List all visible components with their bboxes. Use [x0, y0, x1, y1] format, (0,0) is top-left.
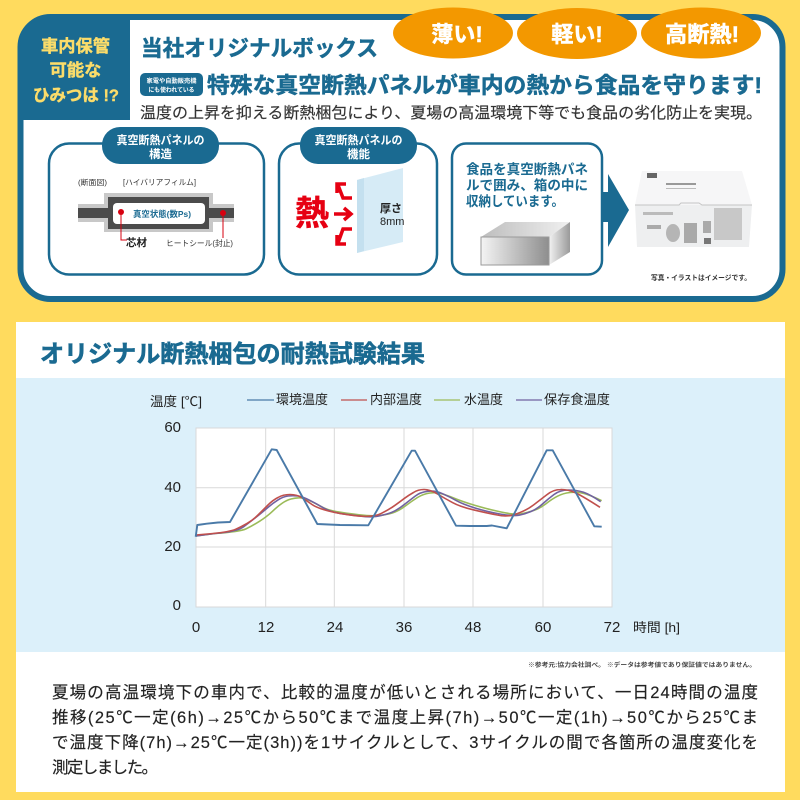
axis: x labels: 12 [258, 619, 274, 636]
panel: panel structure: [ハイバリアフィルム] [123, 178, 196, 187]
sidebar: why it can be stored in a car [20, 17, 130, 120]
badge: also used in appliances: 家電や自動販売機 [146, 77, 196, 85]
badge: also used in appliances: にも使われている [148, 86, 194, 94]
badge: also used in appliances [140, 73, 203, 96]
sidebar: why it can be stored in a car: 車内保管 [41, 36, 110, 56]
sidebar: why it can be stored in a car: 可能な [50, 60, 102, 80]
heading: original box: 当社オリジナルボックス [141, 36, 378, 61]
axis: x labels: 72 [604, 619, 620, 636]
panel: panel function: 厚さ [380, 202, 402, 215]
panel: panel function [279, 127, 437, 274]
panel: panel function: 真空断熱パネルの [314, 133, 402, 147]
panel: packing note [452, 144, 602, 274]
icon: heat arrows [334, 184, 352, 244]
heading: special vacuum panel: 特殊な真空断熱パネルが車内の熱から食品を守ります! [207, 73, 762, 98]
panel: panel function: 機能 [347, 147, 370, 161]
text: test method [52, 683, 758, 777]
heading: test results: オリジナル断熱梱包の耐熱試験結果 [40, 341, 425, 368]
axis: x labels: 36 [396, 619, 412, 636]
panel: panel structure: 構造 [149, 147, 172, 161]
icon: insulation panel [357, 168, 403, 253]
line: water temperature [196, 492, 602, 536]
legend: 保存食温度 [544, 392, 610, 407]
chart: temperature over time [196, 428, 612, 607]
axis title: time: 時間 [h] [633, 620, 680, 635]
panel: packing note: 食品を真空断熱パネ [466, 161, 588, 177]
panel: panel function: 8mm [380, 216, 404, 228]
legend: 水温度 [464, 392, 503, 407]
axis: x labels: 60 [535, 619, 551, 636]
image: product box [635, 171, 752, 247]
sidebar: why it can be stored in a car: ひみつは !? [33, 86, 119, 105]
panel: panel structure: (断面図) [78, 177, 108, 187]
arrow: to product [602, 174, 629, 247]
axis: y labels [164, 419, 181, 614]
legend [247, 392, 610, 407]
text: test method: で温度下降(7h)→25℃一定(3h))を1サイクルとして、3サイクルの間で各箇所の温度変化を [52, 733, 758, 752]
panel: original box [20, 8, 782, 299]
axis: y labels: 40 [164, 479, 181, 496]
panel: packing note: ルで囲み、箱の中に [466, 177, 588, 193]
diagram: film cross section: 真空状態(数Ps) [133, 209, 191, 219]
text: test method: 推移(25℃一定(6h)→25℃から50℃まで温度上昇(7h)→50℃一定(1h)→50℃から25℃ま [52, 708, 758, 727]
axis: x labels: 0 [192, 619, 200, 636]
panel: panel structure [49, 127, 264, 274]
axis: y labels: 20 [164, 538, 181, 555]
line: inside temperature [196, 489, 600, 535]
line: food temperature [196, 490, 601, 536]
panel: panel function: 熱 [295, 195, 329, 233]
panel: panel structure: 真空断熱パネルの [116, 133, 204, 147]
text: test method: 測定しました。 [52, 758, 158, 777]
panel: panel structure: 芯材 [126, 236, 147, 249]
legend: 内部温度 [370, 392, 422, 407]
badge: feature pills: 高断熱! [665, 22, 739, 47]
panel: heat test results [16, 322, 785, 792]
caption: image note: 写真・イラストはイメージです。 [651, 273, 751, 282]
axis: y labels: 0 [173, 597, 181, 614]
axis title: temperature: 温度 [℃] [150, 394, 202, 409]
diagram: film cross section [78, 193, 234, 240]
legend: 環境温度 [276, 392, 328, 407]
axis: y labels: 60 [164, 419, 181, 436]
text: test method: 夏場の高温環境下の車内で、比較的温度が低いとされる場所において、一日24時間の温度 [52, 683, 758, 702]
badge: feature pills: 薄い! [431, 22, 483, 47]
axis: x labels: 48 [465, 619, 481, 636]
footnote: ※参考元:協力会社調べ。 ※データは参考値であり保証値ではありません。 [528, 661, 756, 669]
text: description: 温度の上昇を抑える断熱梱包により、夏場の高温環境下等でも食品の劣化防止を実現。 [140, 104, 762, 122]
panel: packing note: 収納しています。 [466, 193, 564, 209]
axis: x labels: 24 [327, 619, 343, 636]
line: ambient temperature [196, 449, 602, 537]
icon: panel block [481, 222, 570, 265]
panel: panel structure: ヒートシール(封止) [166, 238, 233, 248]
axis: x labels [192, 619, 620, 636]
badge: feature pills: 軽い! [551, 22, 603, 47]
badge: feature pills [393, 8, 761, 59]
